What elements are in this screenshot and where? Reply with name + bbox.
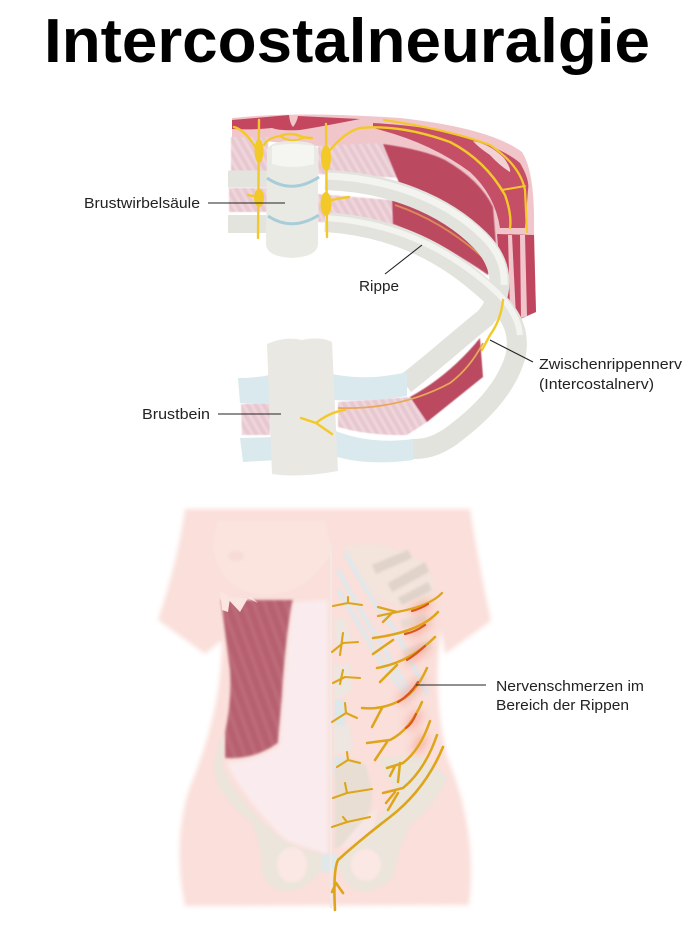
- left pelvis bone: [215, 733, 323, 891]
- rectus sheath: [226, 600, 328, 855]
- label: Nervenschmerzen im Bereich der Rippen: Nervenschmerzen im: [496, 679, 644, 695]
- label: Brustwirbelsäule: Brustwirbelsäule: [84, 196, 200, 212]
- cartilage: costal cartilage: [238, 372, 413, 462]
- label: Rippe: [359, 245, 422, 295]
- illustration: upper thorax segment with ribs and nerves: [228, 114, 536, 475]
- pubic symphysis: [322, 854, 337, 872]
- rib: upper rib: [228, 176, 504, 384]
- nerves: [332, 593, 443, 910]
- breast: [213, 520, 332, 595]
- body silhouette: [158, 509, 491, 906]
- vertebral column: [266, 141, 319, 258]
- muscle: first intercostal space: [231, 137, 498, 270]
- label: Rippe: Rippe: [359, 279, 399, 295]
- label: Zwischenrippennerv: Zwischenrippennerv: [539, 357, 683, 373]
- right side ribcage: [334, 544, 434, 775]
- label: Zwischenrippennerv: [490, 340, 683, 393]
- label: Nervenschmerzen im Bereich der Rippen: Bereich der Rippen: [496, 698, 629, 714]
- sternum: [267, 338, 338, 475]
- title: Intercostalneuralgie: [44, 7, 650, 76]
- illustration: torso with intercostal nerves: [158, 509, 491, 910]
- right pelvis bone: [335, 757, 447, 891]
- label: Zwischenrippennerv: (Intercostalnerv): [539, 377, 654, 393]
- label: Brustbein: [142, 407, 281, 423]
- midline divider: [330, 545, 332, 908]
- muscle: anterior intercostal: [241, 338, 483, 435]
- abdominal muscle: [220, 590, 293, 758]
- rib: lower rib: [228, 218, 520, 449]
- nerve highlights: inflamed segments: [398, 604, 428, 728]
- label: Nervenschmerzen im Bereich der Rippen: [416, 679, 644, 714]
- nipple: [228, 551, 244, 561]
- muscle band: outer back wall: [232, 114, 536, 320]
- nerve: spinal nerves and ganglia: [234, 120, 527, 350]
- muscle: second intercostal space: [229, 188, 492, 275]
- label: Brustbein: Brustbein: [142, 407, 210, 423]
- pain glow: [400, 602, 430, 752]
- nerve: anterior branch on sternum: [301, 410, 345, 434]
